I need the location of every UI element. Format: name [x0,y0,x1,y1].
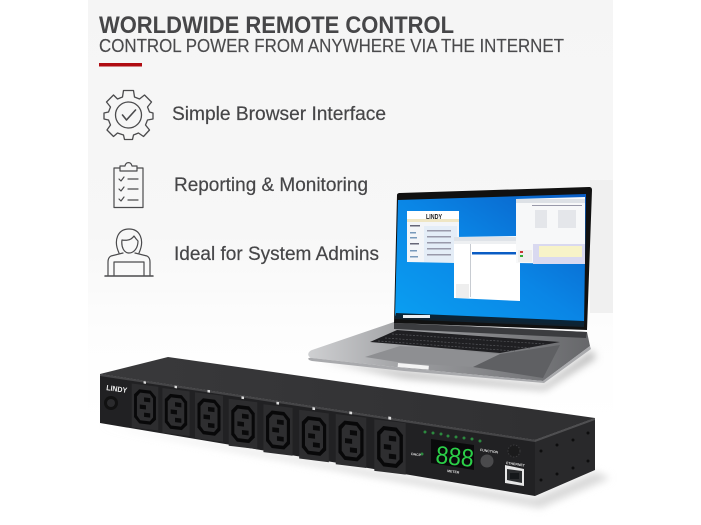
laptop shadow [320,350,596,390]
dhcp label: DHCP [411,452,422,457]
icon: system admin at laptop [105,229,153,276]
power button [104,396,118,410]
screen window: web interface [407,211,459,263]
red accent line [99,63,142,66]
function label: FUNCTION [480,448,499,455]
led display: 888 [434,441,475,473]
outlet 5 [263,400,293,456]
outlet 4 [229,395,257,449]
status leds [420,430,482,456]
laptop screen [394,187,592,330]
pdu shadow [100,425,610,508]
speaker grille [508,445,520,457]
outlet 3 [195,388,223,442]
screen window: power monitor [516,197,585,264]
text: ideal for system admins: Ideal for System Admins [174,244,379,265]
pdu top face [100,357,595,440]
outlet 8 [374,415,406,475]
keyboard [370,330,560,353]
text: simple browser interface: Simple Browser Interface [172,104,386,125]
pdu side face [535,418,595,496]
lindy logo: LINDY [106,383,128,395]
outlet 6 [299,406,329,462]
outlet 2 [162,384,190,436]
icon: clipboard checklist [114,163,143,208]
meter label: METER [447,469,460,475]
laptop base [308,322,590,381]
outlet 7 [336,410,366,468]
screen window: management software [454,236,520,301]
right backdrop strip [590,180,613,313]
background panel [88,0,613,425]
laptop [308,187,596,390]
icon: gear with check [104,90,153,140]
pdu front face [100,374,535,496]
title: WORLDWIDE REMOTE CONTROL [99,12,454,39]
outlet 1 [132,380,158,430]
subtitle: CONTROL POWER FROM ANYWHERE VIA THE INTERNET [99,36,564,56]
function button [480,454,494,468]
taskbar [395,313,584,325]
ethernet label: ETHERNET [506,461,526,468]
touchpad reflection [365,346,500,367]
ethernet port [505,465,524,486]
text: reporting and monitoring: Reporting & Monitoring [174,175,368,196]
power distribution unit [100,357,610,508]
screen window: web interface: LINDY [426,214,442,221]
